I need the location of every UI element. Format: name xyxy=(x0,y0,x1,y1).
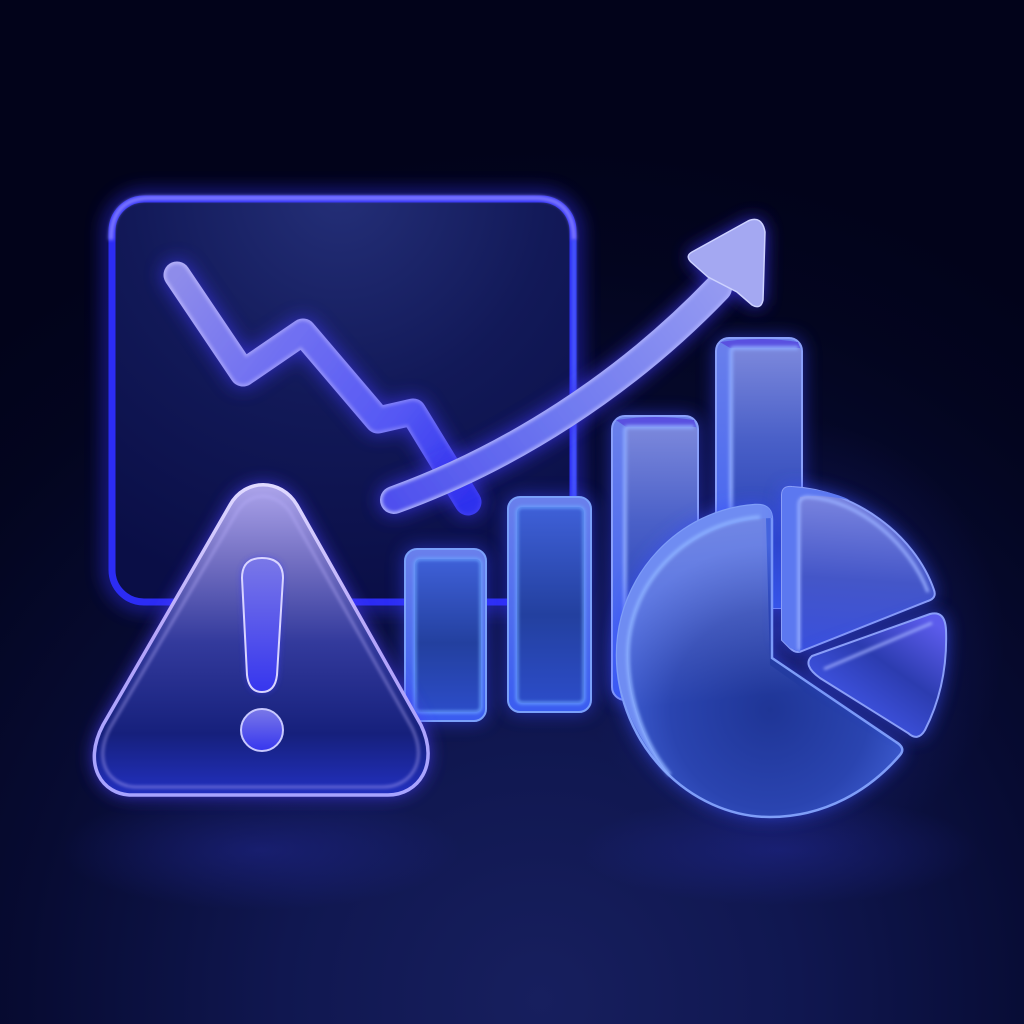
bar 3 xyxy=(611,415,699,700)
pie chart xyxy=(617,487,946,817)
pie: small slice xyxy=(808,613,946,737)
falling trend line xyxy=(177,275,468,502)
bar 1 xyxy=(404,548,487,722)
bar 4 xyxy=(715,337,803,608)
panel: chart screen xyxy=(110,197,575,604)
bar 2 xyxy=(507,496,592,713)
pie: main slice xyxy=(617,505,902,817)
warning triangle xyxy=(94,485,428,795)
pie: upper slice xyxy=(782,487,935,652)
exclamation mark xyxy=(241,558,283,751)
rising arrow xyxy=(394,219,765,500)
